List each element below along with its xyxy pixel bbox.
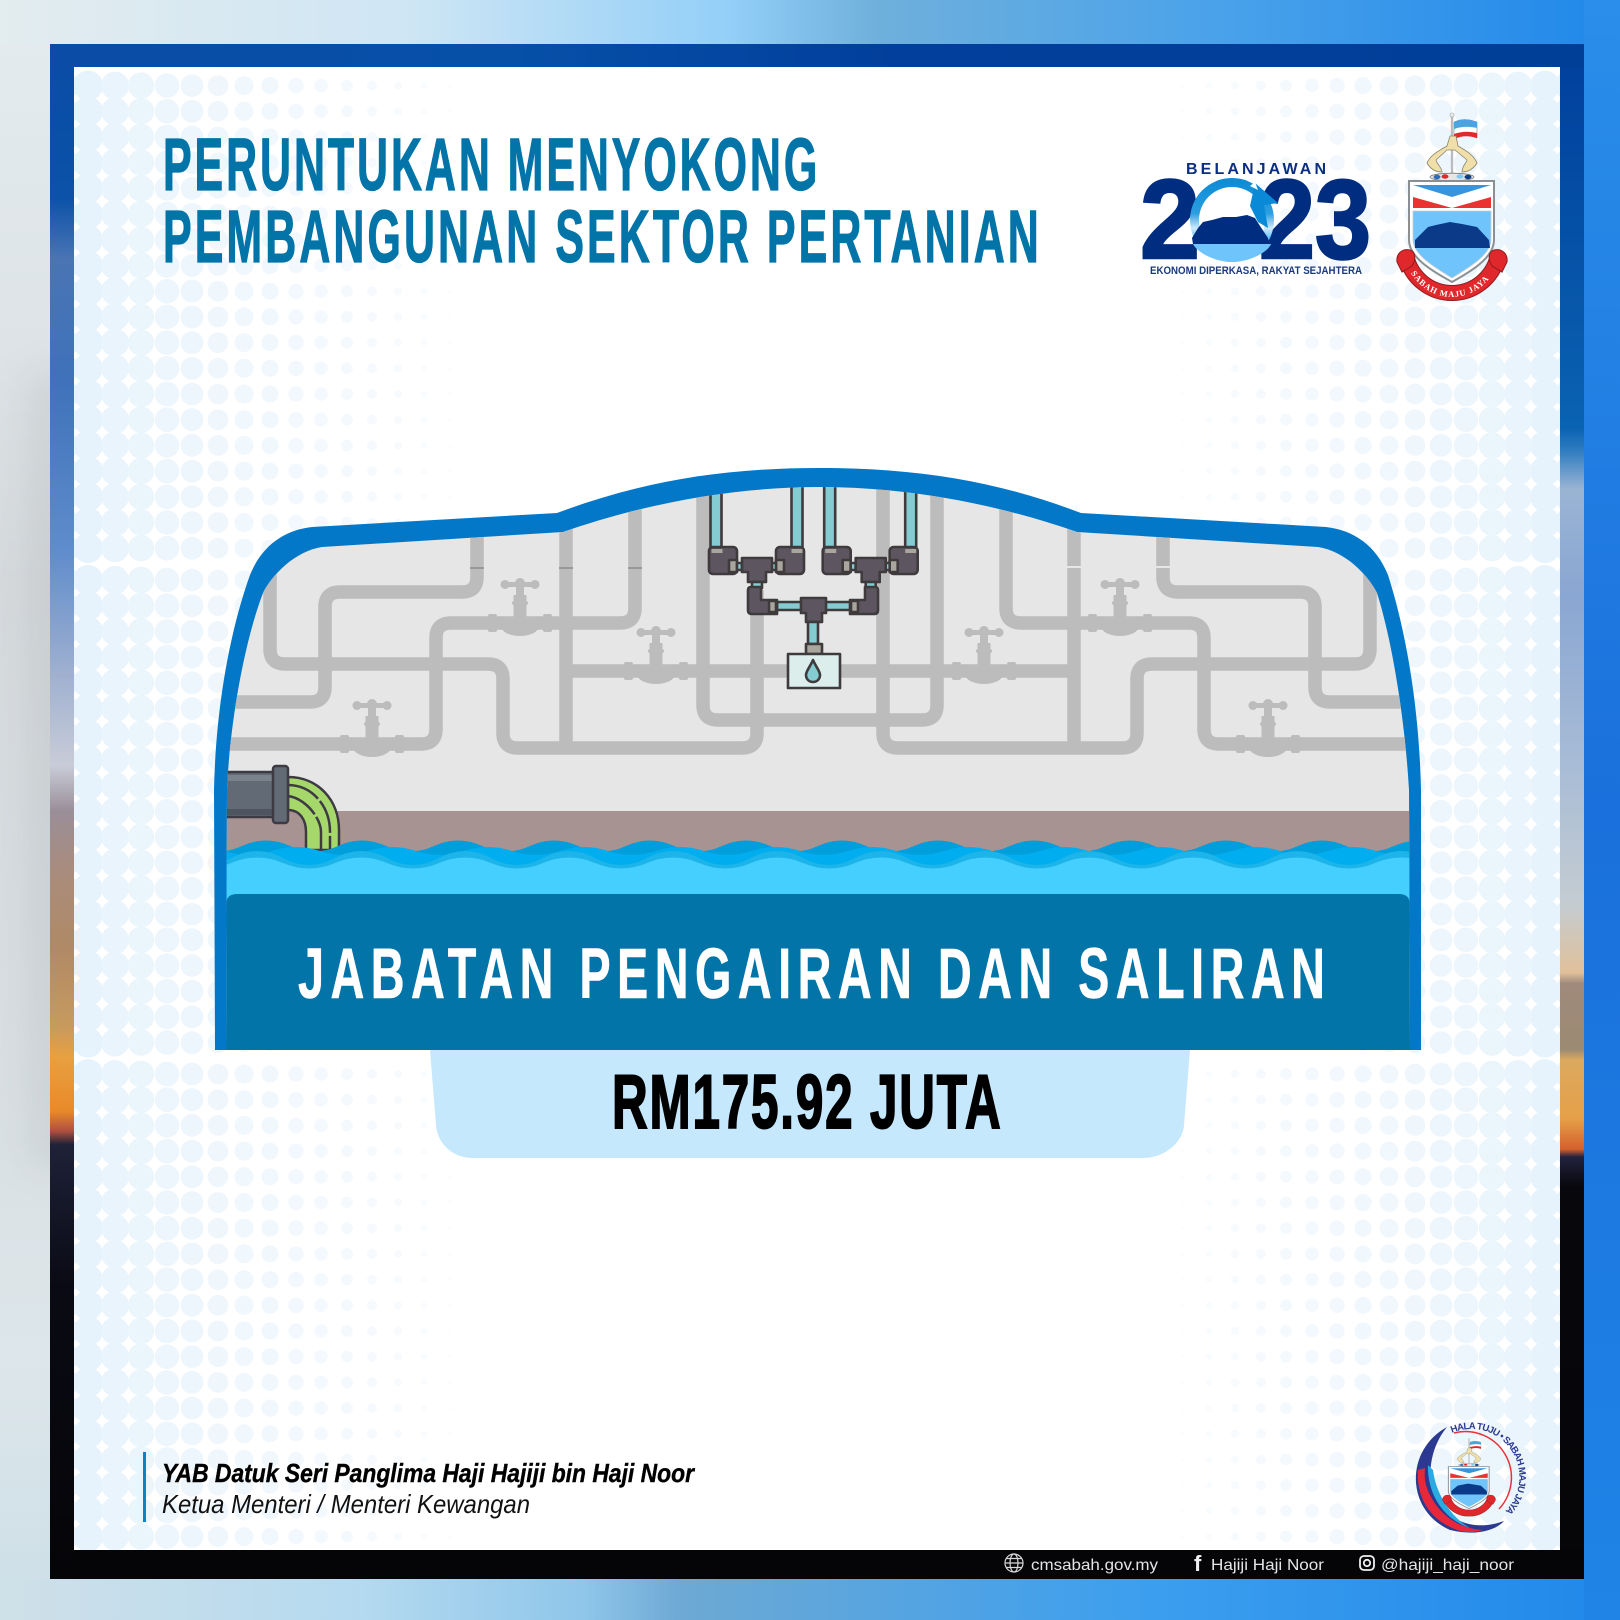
footer bar: cmsabah.gov.my [1031,1557,1158,1574]
logo: Belanjawan 2023: EKONOMI DIPERKASA, RAKYAT SEJAHTERA [1150,265,1362,277]
central manifold icon [709,480,918,688]
title: PERUNTUKAN MENYOKONG [163,123,817,206]
icon: facebook: f [1194,1551,1202,1576]
icon: ring with mountain and arrow [1190,178,1278,262]
icon: taps [340,578,1300,757]
title [163,123,1039,278]
logo: Hala Tuju Sabah Maju Jaya [1416,1422,1526,1533]
attribution: Chief Minister: YAB Datuk Seri Panglima Haji Hajiji bin Haji Noor [162,1458,696,1488]
title: PEMBANGUNAN SEKTOR PERTANIAN [163,195,1039,278]
logo: Sabah coat of arms: SABAH MAJU JAYA [1411,270,1489,297]
banner background [226,894,1410,1050]
ground band [200,811,1440,861]
footer bar: @hajiji_haji_noor [1381,1557,1515,1574]
footer bar: Hajiji Haji Noor [1211,1557,1325,1574]
illustration: water tank with pipes [127,468,1442,1060]
panel: amount tab [430,1050,1190,1158]
logo: Belanjawan 2023: BELANJAWAN [1186,161,1326,178]
water waves [226,840,1410,900]
tank interior [226,487,1410,1050]
logo: Belanjawan 2023: 2 [1140,157,1200,282]
icon: instagram [1360,1556,1374,1570]
outlet pipe [215,766,339,850]
footer bar [74,1550,1584,1579]
logo: Belanjawan 2023 [1140,157,1371,282]
icon: globe [1005,1554,1023,1572]
attribution: Chief Minister: Ketua Menteri / Menteri Kewangan [162,1489,530,1519]
logo: Sabah coat of arms [1396,112,1508,301]
banner heading: JABATAN PENGAIRAN DAN SALIRAN [298,934,1325,1013]
amount: RM175.92 JUTA [612,1059,1001,1145]
tank outline [214,468,1421,1050]
logo: Hala Tuju Sabah Maju Jaya: HALA TUJU • SABAH MAJU JAYA [1450,1422,1526,1514]
grey pipe network [220,480,1420,748]
logo: Belanjawan 2023: 23 [1259,157,1371,282]
attribution: Chief Minister [143,1452,696,1522]
